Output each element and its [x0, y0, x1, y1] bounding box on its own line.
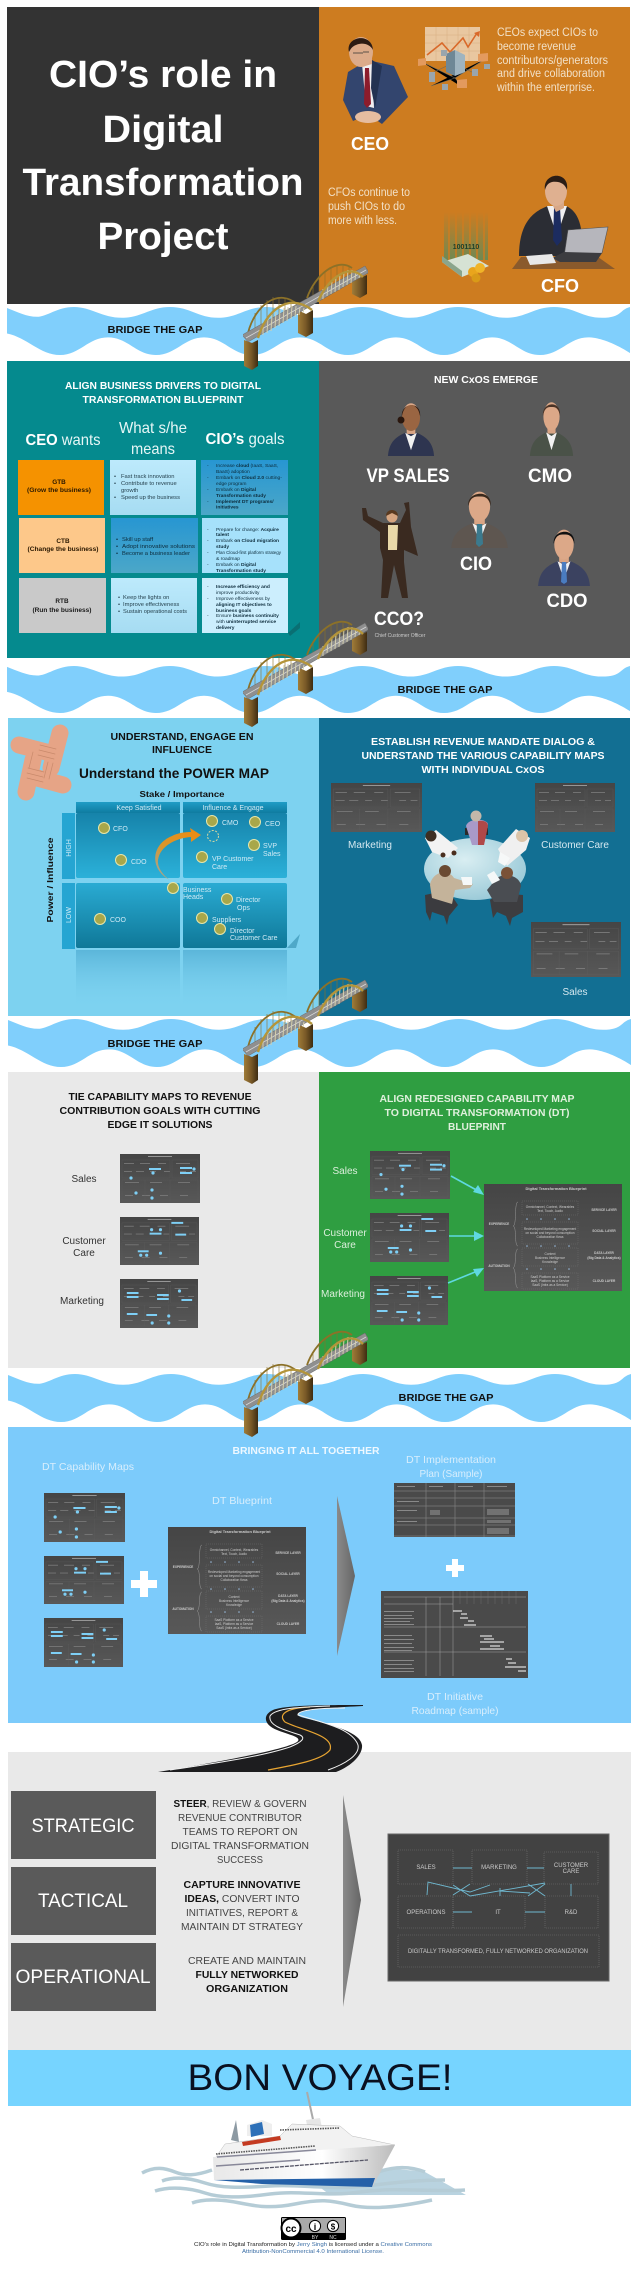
chart: power map matrix: Care	[212, 864, 227, 871]
heading: main title: Digital	[102, 109, 224, 151]
banner: bon voyage	[8, 2050, 631, 2106]
table row: RTB: •	[118, 602, 120, 608]
table row: RTB: (Run the business)	[32, 607, 92, 614]
table row: CTB: •	[116, 544, 118, 550]
chart: power map matrix: Customer Care	[230, 935, 278, 942]
map: customer care	[120, 1217, 199, 1265]
panel: revenue mandate dialog	[319, 718, 630, 1016]
labels: Customer	[323, 1228, 367, 1239]
arrow: influence shift	[155, 828, 201, 880]
table row: GTB: Increase cloud (IaaS, SaaS,	[216, 463, 278, 469]
table row: GTB: •	[114, 481, 116, 487]
icon: creative commons badge: i	[314, 2222, 316, 2232]
table row: GTB: -	[207, 464, 209, 469]
blueprint	[168, 1527, 306, 1634]
map: marketing	[370, 1276, 448, 1325]
table row: CTB: Prepare for change: Acquire	[216, 527, 279, 533]
map: marketing	[44, 1618, 123, 1667]
labels: Sales	[562, 987, 588, 998]
table row: GTB: •	[114, 474, 116, 480]
table row: RTB: Ensure business continuity	[216, 613, 279, 619]
heading	[380, 1093, 574, 1133]
table row: GTB: (Grow the business)	[27, 487, 91, 494]
text: CFO demand: more with less.	[328, 215, 397, 227]
heading: align: ALIGN BUSINESS DRIVERS TO DIGITAL	[65, 380, 262, 392]
table row: GTB: Embark on Cloud 2.0 cutting-	[216, 475, 282, 481]
icon: bridge 4	[242, 1332, 368, 1437]
map: customer care	[535, 783, 615, 832]
labels: Sales	[332, 1166, 358, 1177]
labels: Marketing	[348, 840, 392, 851]
chart: power map matrix: Ops	[237, 905, 250, 912]
label: initiative roadmap: Roadmap (sample)	[412, 1705, 498, 1717]
table row: CTB: -	[207, 563, 209, 568]
heading: main title: CIO’s role in	[49, 54, 277, 96]
chart: power map matrix: CMO	[222, 820, 239, 827]
table row: GTB: Fast track innovation	[121, 474, 174, 480]
icon: CIO portrait	[451, 492, 508, 548]
table row: RTB: Improve effectiveness	[123, 602, 179, 608]
icon: money and binary: 1001110	[453, 244, 479, 251]
column headers: CIO’s goals	[206, 431, 284, 448]
icon: creative commons badge	[281, 2217, 346, 2241]
box: strategic	[11, 1791, 156, 1859]
column headers	[26, 420, 284, 458]
heading: UNDERSTAND, ENGAGE EN	[110, 731, 254, 743]
heading: BLUEPRINT	[448, 1121, 507, 1133]
text: CEO expectation: within the enterprise.	[496, 82, 595, 94]
text: strategic description: DIGITAL TRANSFORMATION	[171, 1841, 309, 1852]
arrow: right	[343, 1795, 361, 2007]
chart: power map matrix: LOW	[66, 907, 73, 923]
icon: stacked hands	[19, 733, 63, 792]
text: CFO demand: CFOs continue to	[328, 187, 410, 199]
box: operational	[11, 1943, 156, 2011]
table row: CTB: •	[116, 551, 118, 557]
chart: power map matrix	[45, 789, 300, 1010]
labels: Sales	[71, 1174, 97, 1185]
table row: CTB: -	[207, 539, 209, 544]
text: CFO demand: push CIOs to do	[328, 201, 405, 213]
text: tactical description	[181, 1880, 303, 1933]
chart: power map matrix: Keep Satisfied	[116, 805, 162, 812]
chart: power map matrix: Stake / Importance	[140, 789, 225, 799]
icon: CDO portrait	[538, 530, 590, 586]
heading: TO DIGITAL TRANSFORMATION (DT)	[384, 1107, 570, 1119]
text: CEO expectation	[496, 27, 608, 94]
label: bridge the gap: BRIDGE THE GAP	[108, 1038, 202, 1050]
text: chief customer officer: Chief Customer Officer	[375, 633, 426, 639]
heading: ESTABLISH REVENUE MANDATE DIALOG &	[371, 736, 595, 748]
text: operational description: FULLY NETWORKED	[196, 1970, 298, 1981]
heading: UNDERSTAND THE VARIOUS CAPABILITY MAPS	[362, 750, 604, 762]
icon: CEO portrait	[343, 37, 408, 124]
heading	[110, 731, 254, 756]
labels: Care	[334, 1240, 356, 1251]
chart: power map matrix: Influence & Engage	[202, 805, 264, 812]
diagram: networked organization: CUSTOMER	[554, 1863, 589, 1869]
labels: Marketing	[321, 1289, 365, 1300]
text: CFO demand	[328, 187, 410, 227]
labels	[60, 1174, 106, 1307]
table row: CTB: -	[207, 528, 209, 533]
text: operational description	[188, 1956, 306, 1995]
text: strategic description: STEER, REVIEW & GOVERN	[174, 1799, 306, 1810]
label: CDO: CDO	[546, 591, 588, 612]
panel: bringing it all together	[8, 1427, 631, 1723]
icon: bridge 2	[242, 622, 368, 727]
column headers: means	[131, 441, 175, 458]
icon: CCO dancer	[362, 502, 418, 598]
text: CEO expectation: and drive collaboration	[497, 68, 605, 80]
diagram: networked organization: DIGITALLY TRANSFORMED, FULLY NETWORKED ORGANIZATION	[408, 1949, 588, 1955]
table row: RTB: aligning IT objectives to	[216, 602, 272, 608]
label: bridge the gap: BRIDGE THE GAP	[108, 324, 202, 336]
icon: creative commons badge: cc	[285, 2224, 297, 2235]
chart: power map matrix: COO	[110, 917, 126, 924]
table row: CTB: Skill up staff	[122, 537, 154, 543]
icon: CMO portrait	[530, 402, 573, 456]
diagram: networked organization: CARE	[563, 1869, 579, 1875]
table: implementation plan	[394, 1483, 515, 1537]
label: capability maps: DT Capability Maps	[42, 1461, 134, 1473]
heading: TIE CAPABILITY MAPS TO REVENUE	[68, 1091, 252, 1103]
text: license	[194, 2242, 432, 2255]
table row: GTB: BaaS) adoption	[216, 469, 250, 475]
chart: power map matrix: SVP	[263, 843, 277, 850]
icon: VP Sales portrait	[388, 403, 434, 456]
box: tactical: TACTICAL	[38, 1891, 128, 1912]
table row: CTB: Become a business leader	[122, 551, 190, 557]
map: marketing	[331, 783, 422, 832]
table row: CTB: Transformation study	[216, 568, 266, 574]
heading: main title	[22, 54, 304, 258]
icon: winding road	[158, 1705, 363, 1772]
label: implementation plan: Plan (Sample)	[420, 1468, 482, 1480]
table row: CTB: & roadmap	[216, 556, 240, 562]
icon: bridge 1	[242, 265, 368, 370]
table row: GTB: GTB	[52, 479, 66, 486]
table row: GTB: edge program	[216, 481, 246, 487]
map: sales	[370, 1151, 450, 1199]
heading: INFLUENCE	[152, 744, 212, 756]
label: initiative roadmap	[412, 1691, 498, 1717]
label: implementation plan	[406, 1454, 496, 1480]
chart: power map matrix: CDO	[131, 859, 147, 866]
text: CEO expectation: become revenue	[497, 41, 576, 53]
chart: initiative roadmap	[381, 1591, 528, 1678]
table row: GTB: Implement DT programs/	[216, 499, 274, 505]
table row: GTB: Transformation study	[216, 493, 266, 499]
map: sales	[44, 1493, 125, 1542]
labels	[321, 1166, 367, 1300]
heading	[362, 736, 604, 776]
panel: strategic tactical operational	[8, 1752, 631, 2050]
table row: CTB	[19, 518, 288, 574]
map: sales	[120, 1154, 200, 1203]
icon: meeting table	[424, 810, 530, 926]
text: tactical description: INITIATIVES, REPORT &	[186, 1908, 298, 1919]
text: tactical description: CAPTURE INNOVATIVE	[184, 1880, 301, 1891]
chart: power map matrix: Sales	[263, 851, 281, 858]
label: bridge the gap: BRIDGE THE GAP	[398, 1392, 494, 1404]
table row: CTB: (Change the business)	[28, 546, 98, 553]
label: blueprint: DT Blueprint	[212, 1495, 272, 1507]
labels	[348, 840, 609, 998]
chart: power map matrix: Director	[230, 928, 255, 935]
chart: power map matrix: VP Customer	[212, 856, 254, 863]
icon: revenue chart and city	[418, 27, 490, 90]
table row: GTB: Speed up the business	[121, 495, 180, 501]
panel: power map	[8, 718, 319, 1016]
label: CCO?: CCO?	[374, 609, 424, 630]
icon: CFO at laptop	[512, 176, 615, 269]
box: tactical	[11, 1867, 156, 1935]
heading: align: TRANSFORMATION BLUEPRINT	[82, 394, 244, 406]
table row: RTB: business goals	[216, 608, 252, 614]
labels: Marketing	[60, 1296, 104, 1307]
table row: CTB: Embark on Digital	[216, 562, 257, 568]
icon: money and binary	[442, 212, 489, 282]
table row: GTB: -	[207, 488, 209, 493]
table row: RTB: Improve effectiveness by	[216, 596, 271, 602]
table row: RTB: •	[118, 609, 120, 615]
text: license: Attribution-NonCommercial 4.0 International License.	[242, 2249, 384, 2255]
icon: creative commons badge: $	[331, 2222, 336, 2232]
table row: GTB	[18, 460, 288, 515]
banner: bon voyage: BON VOYAGE!	[188, 2057, 452, 2098]
table row: GTB: •	[114, 495, 116, 501]
diagram: networked organization: IT	[495, 1910, 501, 1916]
arrows to blueprint	[448, 1176, 484, 1283]
text: strategic description	[171, 1799, 309, 1866]
table row: RTB: Keep the lights on	[123, 595, 169, 601]
table row: RTB	[19, 578, 300, 636]
table row: RTB: delivery	[216, 625, 235, 631]
icon: plus	[446, 1559, 464, 1577]
diagram: networked organization: MARKETING	[481, 1865, 517, 1871]
table row: RTB: improve productivity	[216, 590, 260, 596]
icon: creative commons badge: BY	[312, 2235, 319, 2241]
labels: Customer	[62, 1236, 106, 1247]
table row: GTB: -	[207, 476, 209, 481]
labels: Customer Care	[541, 840, 609, 851]
wave band 4	[8, 1374, 631, 1422]
map: customer care	[44, 1556, 124, 1604]
table row: CTB: talent	[216, 532, 229, 538]
icon: bridge 3	[242, 979, 368, 1084]
table row: RTB: -	[207, 597, 209, 602]
label: CEO: CEO	[351, 134, 389, 154]
label: CFO: CFO	[541, 276, 579, 296]
text: tactical description: MAINTAIN DT STRATEGY	[181, 1922, 303, 1933]
text: strategic description: REVENUE CONTRIBUTOR	[178, 1813, 302, 1824]
table row: RTB: Sustain operational costs	[123, 609, 187, 615]
chart: power map matrix: Power / Influence	[45, 837, 55, 922]
chart: power map matrix: CEO	[265, 821, 281, 828]
arrow: right	[337, 1496, 355, 1656]
diagram: networked organization: R&D	[565, 1910, 578, 1916]
chart: power map matrix: CFO	[113, 826, 128, 833]
table row: RTB: with uninterrupted service	[216, 619, 276, 625]
table row: GTB: Contribute to revenue	[121, 481, 177, 487]
heading: NEW CxOS EMERGE	[434, 374, 538, 386]
heading: EDGE IT SOLUTIONS	[108, 1119, 212, 1131]
panel: tie capability maps	[8, 1072, 319, 1368]
table row: CTB: •	[116, 537, 118, 543]
label: CIO: CIO	[460, 554, 492, 575]
heading: BRINGING IT ALL TOGETHER	[232, 1445, 380, 1457]
labels: Care	[73, 1248, 95, 1259]
text: strategic description: SUCCESS	[217, 1855, 263, 1866]
table row: CTB: study	[216, 544, 229, 550]
icon: plus	[131, 1571, 157, 1597]
panel: align business drivers	[7, 361, 319, 658]
column headers: CEO wants	[26, 432, 100, 449]
table row: CTB: Embark on Cloud migration	[216, 538, 279, 544]
icon: cruise ship	[142, 2092, 466, 2207]
table row: RTB: -	[207, 585, 209, 590]
label: VP Sales: VP SALES	[366, 466, 450, 487]
blueprint	[484, 1184, 622, 1291]
table row: RTB: Increase efficiency and	[216, 584, 270, 590]
diagram: networked organization: OPERATIONS	[407, 1910, 445, 1916]
text: license: CIO's role in Digital Transformation by Jerry Singh is licensed under a Creative Commons	[194, 2242, 432, 2248]
map: marketing	[120, 1279, 198, 1328]
wave band 2	[7, 666, 630, 713]
table row: GTB: Embark on Digital	[216, 487, 257, 493]
subheading: Understand the POWER MAP	[79, 766, 269, 781]
table row: GTB: -	[207, 500, 209, 505]
table row: GTB: growth	[121, 488, 138, 494]
heading: WITH INDIVIDUAL CxOS	[422, 764, 544, 776]
map: customer care	[370, 1213, 449, 1262]
box: strategic: STRATEGIC	[32, 1816, 134, 1837]
table row: CTB: -	[207, 551, 209, 556]
panel: new CxOs emerge	[319, 361, 630, 658]
chart: power map matrix: Heads	[183, 894, 204, 901]
table row: RTB: RTB	[55, 598, 69, 605]
chart: power map matrix: Director	[236, 897, 261, 904]
text: CEO expectation: contributors/generators	[497, 55, 608, 67]
table row: CTB: CTB	[56, 538, 70, 545]
chart: power map matrix: Business	[183, 887, 212, 894]
heading: main title: Transformation	[22, 162, 304, 204]
text: CEO expectation: CEOs expect CIOs to	[497, 27, 598, 39]
diagram: networked organization: SALES	[416, 1865, 436, 1871]
panel: align redesigned capability map	[319, 1072, 630, 1368]
table row: CTB: Plan Cloud-first platform strategy	[216, 550, 282, 556]
panel: CEO and CFO	[319, 7, 630, 304]
chart: power map matrix: Suppliers	[212, 917, 242, 924]
heading: main title: Project	[98, 216, 229, 258]
text: operational description: CREATE AND MAINTAIN	[188, 1956, 306, 1967]
heading	[60, 1091, 260, 1131]
table row: CTB: Adopt innovative solutions	[122, 544, 195, 550]
diagram: networked organization	[388, 1834, 609, 1981]
heading: CONTRIBUTION GOALS WITH CUTTING	[60, 1105, 260, 1117]
heading: align	[65, 380, 262, 406]
text: strategic description: TEAMS TO REPORT ON	[182, 1827, 298, 1838]
label: CMO: CMO	[528, 466, 572, 487]
table row: RTB: •	[118, 595, 120, 601]
wave band 3	[8, 1019, 631, 1067]
chart: power map matrix: HIGH	[66, 839, 73, 857]
box: operational: OPERATIONAL	[16, 1967, 150, 1988]
label: bridge the gap: BRIDGE THE GAP	[398, 684, 492, 696]
table row: GTB: initiatives	[216, 504, 239, 510]
label: initiative roadmap: DT Initiative	[427, 1691, 483, 1703]
text: tactical description: IDEAS, CONVERT INTO	[184, 1894, 300, 1905]
label: implementation plan: DT Implementation	[406, 1454, 496, 1466]
text: operational description: ORGANIZATION	[206, 1984, 288, 1995]
table row: RTB: -	[207, 614, 209, 619]
map: sales	[531, 922, 621, 977]
column headers: What s/he	[119, 420, 187, 437]
icon: creative commons badge: NC	[329, 2235, 337, 2241]
panel: title	[7, 7, 319, 304]
wave band 1	[7, 307, 630, 355]
heading: ALIGN REDESIGNED CAPABILITY MAP	[380, 1093, 574, 1105]
